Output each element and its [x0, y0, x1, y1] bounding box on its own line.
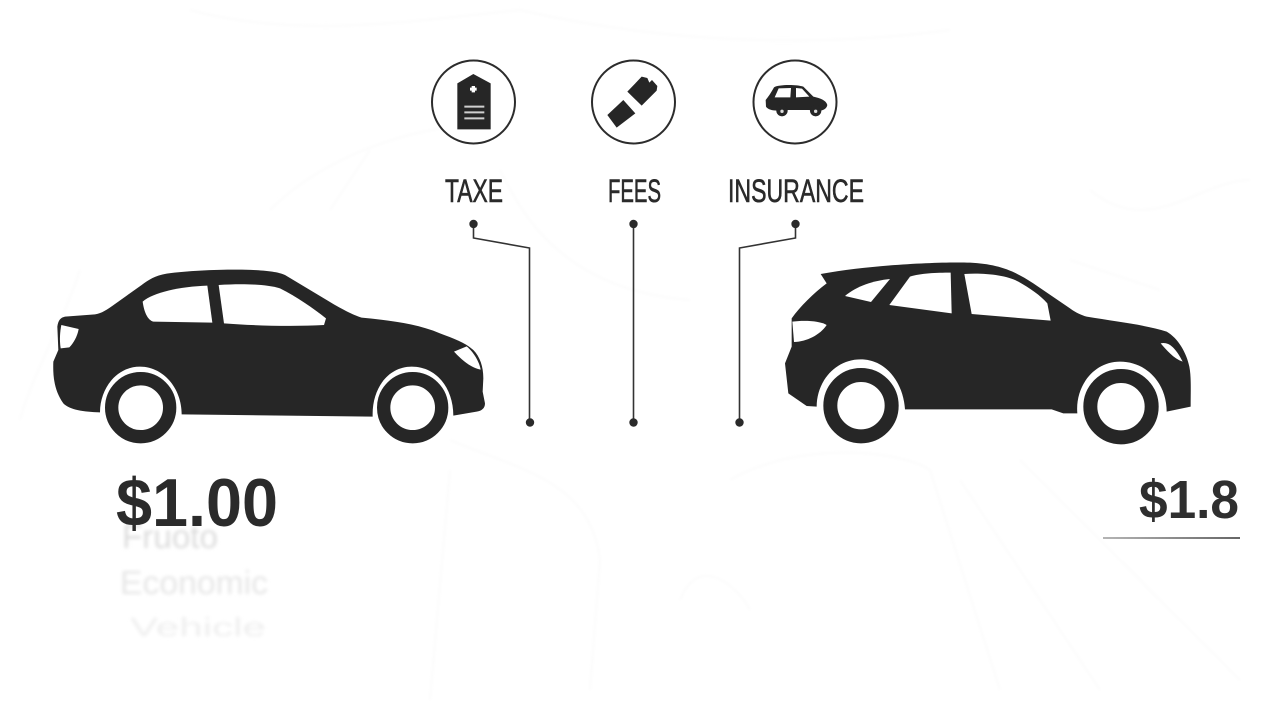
connector: taxes: [469, 220, 534, 427]
car: SUV silhouette: [785, 262, 1191, 437]
price: left car: $1.00: [116, 465, 278, 541]
car: sedan silhouette: [53, 270, 485, 437]
faded caption: left car: [120, 518, 268, 642]
connector: fees: [629, 220, 638, 427]
underline: right price: [1103, 537, 1240, 539]
connector: insurance: [735, 220, 800, 427]
faded caption: left car: Fruoto: [122, 518, 218, 555]
icon: tax tag: [432, 60, 515, 144]
label: taxes: TAXE: [445, 173, 503, 209]
faded caption: left car: Economic: [120, 564, 268, 601]
label: insurance: INSURANCE: [728, 173, 864, 209]
icon: fees pill: [592, 60, 675, 144]
price: right car: $1.8: [1139, 470, 1239, 530]
label: fees: FEES: [608, 173, 661, 209]
faded caption: left car: Vehicle: [130, 612, 266, 642]
icon: insurance car: [754, 60, 836, 144]
